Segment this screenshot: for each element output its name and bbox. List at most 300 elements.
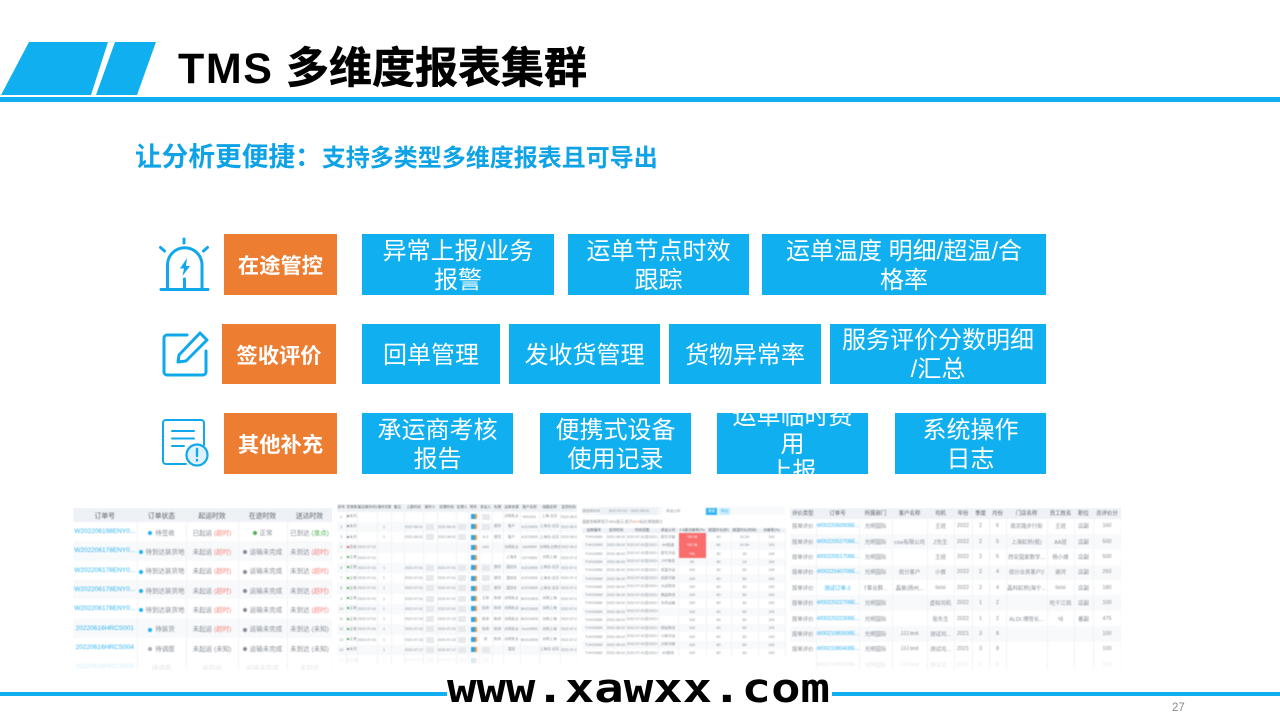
screenshot table: waybill detail: 上海仓 [506,555,517,559]
box: portable device: 便携式设备 [556,416,676,444]
screenshot table: temperature compliance: 100 [689,585,695,589]
screenshot table: service evaluation: 着副 [1078,617,1089,623]
box: node timeliness [568,234,749,295]
box: receipt [362,324,500,384]
screenshot table: waybill detail: 陈师 [494,617,501,621]
footer rule left [0,692,447,696]
screenshot table: waybill detail: 光明乳业 [504,606,519,610]
screenshot table: service evaluation: 3 [979,631,982,637]
screenshot table: waybill detail: AJ210605 [521,566,538,570]
screenshot table: waybill detail: 2022-07-23 [438,627,456,631]
screenshot table: temperature compliance: 东风运输 [661,601,675,605]
screenshot table: service evaluation: 年份 [958,511,968,517]
screenshot table: service evaluation: 按单评价 [792,632,814,638]
footer rule right [832,692,1280,696]
screenshot table: service evaluation: 按单评价 [792,540,814,546]
screenshot table: service evaluation: W0022022308E... [816,616,859,622]
screenshot table: service evaluation: lisisi [935,585,946,591]
screenshot table: waybill detail: 1 [383,597,385,601]
screenshot table: service evaluation: csw有限公司 [894,540,925,546]
screenshot table: waybill detail: 10 [339,607,343,611]
screenshot table: service evaluation: 2022 [957,569,969,575]
screenshot table: service evaluation: 5 [996,554,999,560]
screenshot table: order timeliness: 未起运 (超时) [193,549,231,556]
screenshot table: waybill detail: 正常 [350,637,357,641]
screenshot table: waybill detail: 提货 [494,524,501,528]
screenshot table: temperature compliance: 2022-06-02 [607,552,625,556]
screenshot table: temperature compliance: 100 [768,568,774,572]
screenshot table: temperature compliance: 承运公司 [661,528,675,532]
screenshot table: temperature compliance: 新华冷运 [661,551,675,555]
screenshot table: service evaluation: 3 [979,646,982,652]
page number: 27 [1172,702,1185,714]
screenshot table: service evaluation: 按单评价 [792,617,814,623]
screenshot table: waybill detail: 13 [339,638,343,642]
screenshot table: temperature compliance: 2022-06-02 [607,618,625,622]
screenshot table: service evaluation: 260 [1102,569,1112,575]
screenshot table: temperature compliance: 2022-06-02 [607,535,625,539]
screenshot table: order timeliness: 待调度 [155,646,175,653]
screenshot table: temperature compliance: 60 [742,626,746,630]
screenshot table: service evaluation [790,508,1121,669]
screenshot table: temperature compliance: 新华冷链 [661,535,675,539]
screenshot table: temperature compliance: 90 [690,560,694,564]
screenshot table: service evaluation: 475 [1102,616,1112,622]
screenshot table: waybill detail: 提货 [494,586,501,590]
tag: in-transit control [224,234,337,295]
filter bar: 承运公司 [666,509,680,513]
screenshot table: temperature compliance: 60 [716,643,720,647]
screenshot table: temperature compliance: 低温冷运 [661,568,675,572]
screenshot table: service evaluation: 2022 [957,585,969,591]
screenshot table: service evaluation: 2 [996,616,999,622]
box: service score: 服务评价分数明细 [842,327,1034,354]
screenshot table: service evaluation: 评价类型 [792,511,814,517]
box: portable device [540,413,691,474]
screenshot table: order timeliness: 运输未完成 [250,588,282,595]
screenshot table: service evaluation: 客户名称 [899,511,920,517]
screenshot table: order timeliness: 未起运 (超时) [193,568,231,575]
box: temperature: 格率 [880,266,928,294]
screenshot table: temperature compliance: 60 [716,618,720,622]
screenshot table: waybill detail: 2022-07-01 [358,607,376,611]
filter bar: 请选择时间 [582,509,600,513]
screenshot table: temperature compliance: *90 [689,552,695,556]
screenshot table: waybill detail: 7 [340,576,342,580]
screenshot table: waybill detail: 2022-07-01 [404,586,423,590]
screenshot table: waybill detail: 张师 [482,606,489,610]
screenshot table: temperature compliance: 100 [689,626,695,630]
screenshot table: waybill detail: BH210605 [521,617,538,621]
screenshot table: waybill detail: 2022-07-17 [438,648,456,652]
screenshot table: order timeliness: 待到达装货地 [146,568,184,575]
screenshot table: waybill detail: 1 [383,576,385,580]
screenshot table: waybill detail: 正常 [350,617,357,621]
screenshot table: service evaluation: 光明国际 [865,555,886,561]
screenshot table: temperature compliance: TVH10065 [585,651,602,655]
screenshot table: waybill detail: BH210605 [521,607,538,611]
screenshot table: service evaluation: 光明国际 [865,632,886,638]
screenshot table: waybill detail: 上海仓-北京 [540,647,559,651]
screenshot table: temperature compliance: 2022-06-02 [607,560,625,564]
screenshot table: service evaluation: 月份 [992,511,1003,517]
screenshot table: waybill detail: 2022-07-17 [404,658,423,662]
screenshot table: order timeliness: 运输未完成 [250,568,282,575]
screenshot table: waybill detail: 2022-07-17 [438,658,456,662]
screenshot table: order timeliness: 未起运 (未知) [193,646,231,653]
screenshot table: waybill detail: 上海仓-北京 [540,524,559,528]
screenshot table: waybill detail: 运单来源 [504,505,519,509]
tag: sign-off and rating [222,324,336,384]
screenshot table: temperature compliance: 60 [742,568,746,572]
screenshot table: service evaluation: 光明国际 [865,663,886,669]
screenshot table: order timeliness: 待到达装货地 [146,588,184,595]
screenshot table: temperature compliance: 100 [768,643,774,647]
box: service score: /汇总 [911,356,965,383]
screenshot table: order timeliness: 订单状态 [148,513,175,520]
screenshot table: temperature compliance: 合格率(%) [763,528,780,532]
screenshot table: order timeliness: 订单号 [95,513,115,520]
screenshot table: waybill detail: 2022-07-01 [438,586,456,590]
screenshot table: waybill detail: 正常 [350,555,357,559]
screenshot table: waybill detail: 线路名称 [542,505,557,509]
screenshot table: service evaluation: 2021 [957,646,969,652]
screenshot table: temperature compliance: 超温时长(时间) [733,528,756,532]
screenshot table: waybill detail: 客户名称 [522,505,537,509]
screenshot table: service evaluation: 门店名称 [1016,511,1037,517]
screenshot table: waybill detail: 14 [339,648,343,652]
screenshot table: service evaluation: 员工姓名 [1050,511,1071,517]
screenshot table: temperature compliance: 30 [742,552,746,556]
filter bar: 导出 [721,509,728,513]
screenshot table: service evaluation: ALDI-博悦长... [1009,617,1044,623]
screenshot table: waybill detail: 提货 [494,565,501,569]
screenshot table: waybill detail: 9 [340,597,342,601]
screenshot table: temperature compliance: 2022-06-02 [607,585,625,589]
screenshot table: waybill detail: 2022-07-01 [404,607,423,611]
screenshot table: waybill detail: 2022-07-01 [358,545,376,549]
screenshot table: service evaluation: 2 [979,569,982,575]
screenshot table: waybill detail: 提货 [494,535,501,539]
table note: 温度合格率低于95%显示,低于80%标红单独统计 [582,520,663,524]
screenshot table: order timeliness: 运输未完成 [250,607,282,614]
screenshot table: service evaluation: 店副 [1078,555,1089,561]
screenshot table: temperature compliance: 60 [716,568,720,572]
screenshot table: waybill detail: 1 [383,586,385,590]
screenshot table: waybill detail: 光明乳业 [504,514,519,518]
screenshot table: temperature compliance: 10.2H [740,535,749,539]
screenshot table: service evaluation: 光明国际 [865,570,886,576]
screenshot table: temperature compliance: JYF物流 [661,559,675,563]
screenshot table: waybill detail: 上海仓-北京 [540,535,559,539]
screenshot table: waybill detail: 2022-07-01 [358,576,376,580]
box: temperature: 运单温度 明细/超温/合 [786,238,1022,264]
screenshot table: waybill detail: 张师 [482,627,489,631]
screenshot table: waybill detail: 异常 [350,545,357,549]
screenshot table: waybill detail: ioioi0605 [522,545,537,549]
screenshot table: order timeliness: 待到达装货地 [146,607,184,614]
screenshot table: temperature compliance: 100 [689,601,695,605]
screenshot table: temperature compliance: 大运物流 [661,584,675,588]
screenshot table: service evaluation: 测试订单-2 [824,586,851,592]
screenshot table: temperature compliance: 60 [742,585,746,589]
screenshot table: temperature compliance: 100 [768,635,774,639]
filter bar: 搜索 [708,509,715,513]
screenshot table: service evaluation: 2 [979,585,982,591]
screenshot table: order timeliness: 待签收 [155,530,175,537]
screenshot table: temperature compliance: TVH10065 [585,643,602,647]
screenshot table: waybill detail: 2022-07-01 [404,597,423,601]
screenshot table: service evaluation: 8 [996,662,999,668]
screenshot table: waybill detail: 备注 [394,505,401,509]
screenshot table: service evaluation: 2 [996,600,999,606]
screenshot table: service evaluation: 2 [979,523,982,529]
screenshot table: service evaluation: 佰分客户 [899,570,920,576]
screenshot table: temperature compliance: 100 [768,535,774,539]
screenshot table: service evaluation: 店副 [1078,570,1089,576]
screenshot table: temperature compliance: 24 [742,560,746,564]
screenshot table: waybill detail: 上报时间 [406,505,421,509]
screenshot table: service evaluation: 3 [979,662,982,668]
screenshot table: temperature compliance: 100 [768,593,774,597]
screenshot table: temperature compliance: 60 [716,585,720,589]
screenshot table: service evaluation: 500 [1102,539,1112,545]
screenshot table: waybill detail: 2022-07-01 [358,566,376,570]
screenshot table: temperature compliance: 60 [742,635,746,639]
screenshot table: temperature compliance: 60 [716,560,720,564]
screenshot table: temperature compliance: 60 [742,643,746,647]
screenshot table: temperature compliance: 2022-06-02 [607,593,625,597]
screenshot table: temperature compliance: 100 [768,585,774,589]
screenshot table: service evaluation: 按单评价 [792,647,814,653]
screenshot table: order timeliness: 未到达 (超时) [290,588,329,595]
box: cargo exception [669,324,821,384]
screenshot table: temperature compliance: 佛益物流 [661,593,675,597]
screenshot table: waybill detail: mxor0605 [522,627,537,631]
screenshot table: temperature compliance: TVH10065 [585,552,602,556]
screenshot table: temperature compliance: 小林冷运 [661,634,675,638]
screenshot table: temperature compliance: 60 [716,635,720,639]
screenshot table: temperature compliance: 2-8度合格率(%) [679,528,705,532]
screenshot table: temperature compliance: 100 [768,543,774,547]
screenshot table: waybill detail: 温控车 [506,576,517,580]
screenshot table: service evaluation: AA班 [1054,540,1067,546]
screenshot table: waybill detail: 1 [383,617,385,621]
screenshot table: temperature compliance: 100 [768,577,774,581]
header decoration: parallelograms [1,42,156,95]
screenshot table: waybill detail: 光明乳业 [504,627,519,631]
screenshot table: service evaluation: 南京路步行街 [1010,524,1043,530]
screenshot table: waybill detail: 1 [383,607,385,611]
screenshot table: service evaluation: 2022 [957,616,969,622]
box: receipt: 回单管理 [383,342,479,368]
box: carrier report [362,413,513,474]
screenshot table: temperature compliance: TVH10065 [585,568,602,572]
screenshot table: service evaluation: W0022060908E... [816,523,859,529]
screenshot table: waybill detail: 光明上海 [542,596,557,600]
filter bar: 2022-07-01 ~ 2022-08-01 [609,509,649,513]
screenshot table: waybill detail: BH210605 [521,597,538,601]
screenshot table: waybill detail: 陈师 [494,627,501,631]
screenshot table: service evaluation: 店副 [1078,586,1089,592]
screenshot table: waybill detail: 2022-07-01 [438,607,456,611]
screenshot table: temperature compliance: 60 [716,543,720,547]
screenshot table: waybill detail: 光明上海 [542,627,557,631]
screenshot table: temperature compliance: 翔运物流 [661,626,675,630]
screenshot table: waybill detail: AJ210605 [521,586,538,590]
screenshot table: waybill detail: 2022-07-01 [438,597,456,601]
screenshot table: service evaluation: 晶科虹桥(海宁... [1007,586,1046,592]
screenshot table: temperature compliance: 100 [768,626,774,630]
screenshot table: temperature compliance: 60 [742,651,746,655]
screenshot table: waybill detail: 温控 [508,647,515,651]
screenshot table: service evaluation: 4 [996,569,999,575]
screenshot table: service evaluation: 光明国际 [865,540,886,546]
screenshot table: temperature compliance: 2022-06-02 [607,635,625,639]
box: temporary fee (overflowing text) [717,413,868,474]
screenshot table: waybill detail: 正常 [350,596,357,600]
screenshot table: order timeliness: 20220616HRCS004 [76,644,134,651]
screenshot table: order timeliness: 运输未完成 [250,646,282,653]
screenshot table: service evaluation: 谢河 [1055,570,1066,576]
screenshot table: service evaluation: 西安国家数学... [1008,555,1045,561]
screenshot table: temperature compliance: TVH10065 [585,535,602,539]
screenshot table: waybill detail: 正常 [350,565,357,569]
screenshot table: waybill detail: 1 [383,658,385,662]
screenshot table: temperature compliance: TVH10065 [585,635,602,639]
screenshot table: order timeliness [73,508,332,670]
screenshot table: service evaluation: 160 [1102,523,1112,529]
screenshot table: temperature compliance: 2022-06-02 [607,643,625,647]
screenshot table: service evaluation: 5 [996,539,999,545]
screenshot table: temperature compliance: 100 [768,601,774,605]
screenshot table: waybill detail: 处理人 [457,505,467,509]
box: system log: 系统操作 [922,416,1018,444]
screenshot table: service evaluation: 按单评价 [792,524,814,530]
screenshot table: order timeliness: 正常 [260,530,272,537]
screenshot table: waybill detail: 光明乳业 [504,545,519,549]
screenshot table: waybill detail: 1 [383,535,385,539]
screenshot table: temperature compliance: TVH10065 [585,610,602,614]
screenshot table: service evaluation: 按单评价 [792,601,814,607]
screenshot table: waybill detail: 附件 [470,505,477,509]
screenshot table: waybill detail: 光明上海 [542,637,557,641]
screenshot table: temperature compliance: 100 [768,552,774,556]
screenshot table: service evaluation: 上海虹桥(枢) [1011,540,1042,546]
screenshot table: service evaluation: 虚拟司机 [930,601,951,607]
screenshot table: service evaluation: 王班 [1055,524,1066,530]
screenshot table: waybill detail: 光明上海 [542,606,557,610]
screenshot table: order timeliness: W202206198ENY0... [74,528,135,535]
screenshot table: temperature compliance: AS物流 [662,651,674,655]
screenshot table: waybill detail: 1 [340,515,342,519]
screenshot table: temperature compliance: TVH10065 [585,593,602,597]
screenshot table: waybill detail: 发货时间 [561,505,576,509]
box: temporary fee (overflowing text): 用 [780,431,804,458]
screenshot table: service evaluation: W0022022708E... [816,600,859,606]
screenshot table: service evaluation: 按单评价 [792,555,814,561]
screenshot table: service evaluation: 按单评价 [792,570,814,576]
screenshot table: temperature compliance: 时间范围 [635,528,649,532]
screenshot table: temperature compliance: 运单编号 [587,528,601,532]
screenshot table: service evaluation: 100 [1102,631,1112,637]
screenshot table: order timeliness: W202206178ENY0... [74,605,135,612]
screenshot table: service evaluation: 8 [996,646,999,652]
filter bar [582,507,785,515]
screenshot table: service evaluation: 测试司... [930,647,951,653]
screenshot table: service evaluation: 100 [1102,646,1112,652]
screenshot table: waybill detail: 正常 [350,576,357,580]
screenshot table: service evaluation: 佰分业务客户2 [1009,570,1044,576]
screenshot table: service evaluation: 4 [996,585,999,591]
box: service score [830,324,1046,384]
screenshot table: order timeliness: W202206178ENY0... [74,547,135,554]
screenshot table: order timeliness: W202206178ENY0... [74,567,135,574]
screenshot table: service evaluation: 店副 [1078,540,1089,546]
screenshot table: waybill detail: 2022-06-01 [404,525,423,529]
screenshot table: service evaluation: 总评价分 [1096,511,1118,517]
box: shipping: 发收货管理 [524,342,644,368]
screenshot table: waybill detail: 光明乳业 [504,596,519,600]
screenshot table: service evaluation: 张先生 [932,617,949,623]
screenshot table: waybill detail: ioioi [482,545,489,549]
screenshot table: service evaluation: 1 [979,600,982,606]
screenshot table: temperature compliance: 100 [689,577,695,581]
screenshot table: service evaluation: 180 [1102,585,1112,591]
screenshot table: waybill detail: 张师 [482,617,489,621]
screenshot table: order timeliness: 已起运 (超时) [193,530,231,537]
screenshot table: temperature compliance: 60 [716,651,720,655]
screenshot table: temperature compliance: 2022-06-02 [607,577,625,581]
screenshot table: temperature compliance: 100 [689,610,695,614]
screenshot table: waybill detail: 正常 [350,586,357,590]
title: TMS [178,45,274,93]
screenshot table: temperature compliance: TVH10065 [585,585,602,589]
screenshot table: order timeliness: W202206178ENY0... [74,586,135,593]
screenshot table: temperature compliance: 60 [716,535,720,539]
screenshot table: waybill detail: 上海-北京 [542,514,557,518]
screenshot table: order timeliness: 20220616HRCS001 [76,625,134,632]
screenshot table: waybill detail: 2022-06-01 [438,525,456,529]
screenshot table: order timeliness: 待到达装货地 [146,549,184,556]
header rule [0,97,1280,102]
tag: other: 其他补充 [238,433,323,457]
screenshot table: order timeliness: 运输未完成 [250,549,282,556]
screenshot table: waybill detail: 处理时间 [439,505,454,509]
screenshot table: waybill detail: 未开始 [346,658,357,662]
screenshot table: waybill detail: 客户 [508,524,515,528]
screenshot table: waybill detail: 1 [383,566,385,570]
screenshot table: waybill detail: AJ210605 [521,535,538,539]
screenshot table: waybill detail: 2022-07-23 [404,617,423,621]
screenshot table: temperature compliance: 60 [716,610,720,614]
screenshot table: waybill detail: 2022-07-01 [358,627,376,631]
screenshot table: service evaluation: W0022051708E... [816,554,859,560]
box: node timeliness: 运单节点时效 [586,238,730,264]
screenshot table: waybill detail: 3 [340,535,342,539]
screenshot table: temperature compliance: 100 [689,643,695,647]
screenshot table: order timeliness: 未到达 (超时) [290,607,329,614]
screenshot table: temperature compliance: 2022-06-02 [607,601,625,605]
screenshot table: service evaluation: JJJ.test [900,631,919,637]
screenshot table: waybill detail: 12 [339,627,343,631]
tag: in-transit control: 在途管控 [238,254,323,278]
screenshot table: temperature compliance: 60 [742,601,746,605]
box: exception report [362,234,554,295]
screenshot table: service evaluation: 2 [979,554,982,560]
screenshot table: service evaluation: 2022 [957,523,969,529]
screenshot table: service evaluation: JJJ.test [900,662,919,668]
